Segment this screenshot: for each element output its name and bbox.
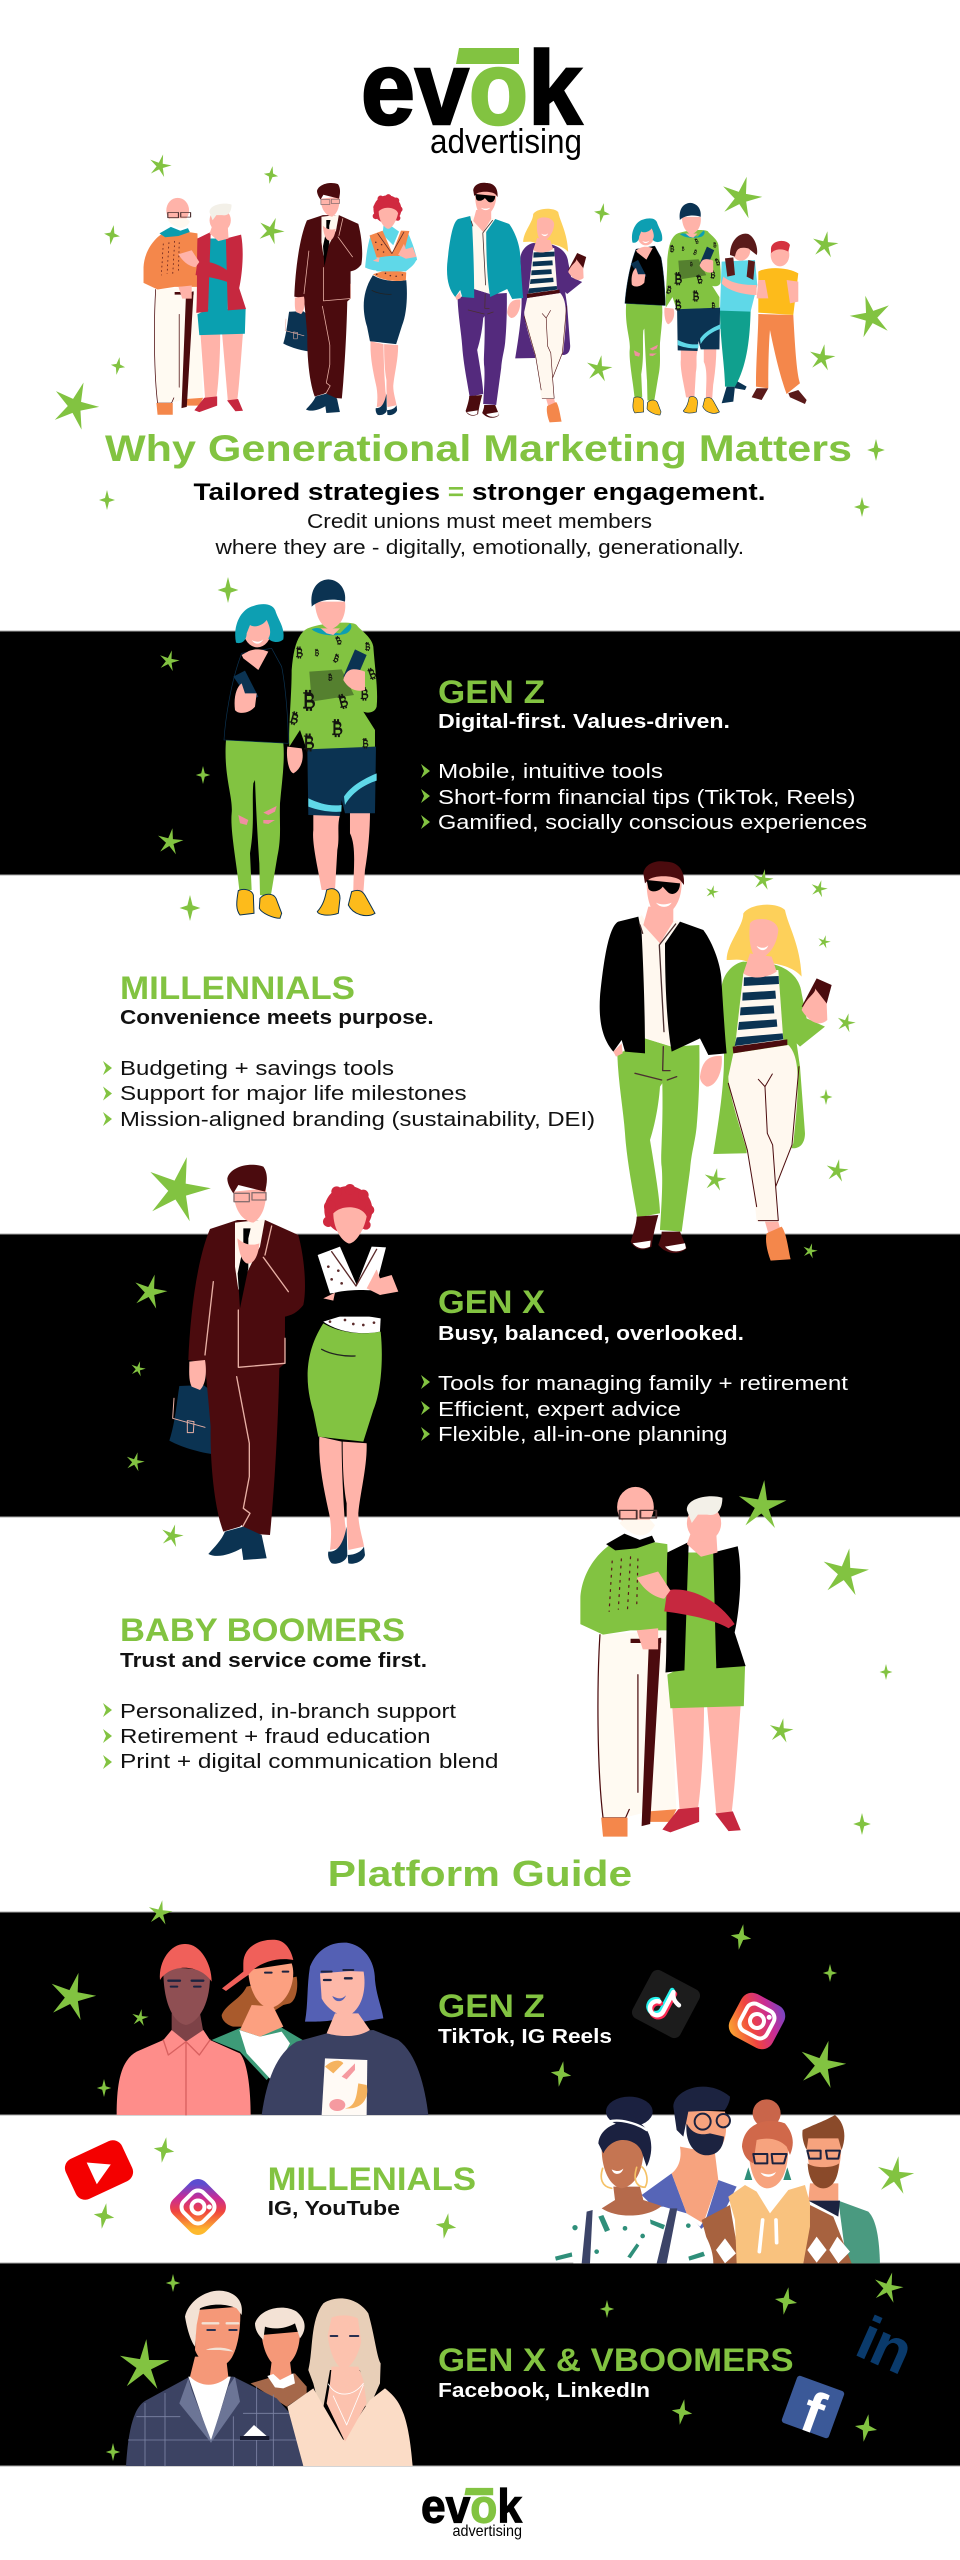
Baby boomer couple illustration	[580, 1487, 746, 1837]
icon: TikTok	[629, 1967, 703, 2041]
top logo: evok	[361, 31, 582, 147]
Gen X and Boomers platform text: GEN X & VBOOMERS	[438, 2342, 794, 2378]
Gen Z text block: Gamified, socially conscious experiences	[438, 812, 867, 834]
Millennials platform text	[268, 2161, 476, 2220]
icon: Instagram on black	[725, 1989, 789, 2053]
portrait: older woman behind	[251, 2308, 307, 2407]
Millennials text block: Convenience meets purpose.	[120, 1007, 434, 1029]
icon: LinkedIn: in	[847, 2304, 922, 2387]
portrait: salmon shirt	[117, 1944, 251, 2115]
footer logo: evok	[421, 2481, 522, 2534]
Gen Z text block: Short-form financial tips (TikTok, Reels)	[438, 787, 856, 809]
Gen X couple illustration	[169, 1165, 399, 1564]
Gen X text block	[421, 1284, 849, 1446]
Millennials text block: Budgeting + savings tools	[120, 1058, 394, 1080]
Boomers text block: Print + digital communication blend	[120, 1751, 498, 1773]
Millennials platform text: IG, YouTube	[268, 2198, 400, 2220]
Millennials text block: Mission-aligned branding (sustainability, DEI)	[120, 1109, 595, 1131]
portrait: blue hair	[262, 1943, 428, 2115]
Millennials text block	[103, 970, 595, 1131]
Gen Z text block	[421, 674, 867, 834]
Gen X and Boomers platform text: Facebook, LinkedIn	[438, 2380, 650, 2402]
icon: Facebook	[777, 2373, 846, 2451]
portrait: man with glasses and beard	[642, 2087, 737, 2230]
Boomers text block: Personalized, in-branch support	[120, 1701, 457, 1723]
hero stars	[47, 152, 895, 603]
tagline: Tailored strategies = stronger engagement.	[194, 479, 766, 506]
Boomers text block: BABY BOOMERS	[120, 1612, 405, 1648]
platform older generations portraits	[126, 2291, 413, 2466]
Gen X and Boomers platform text	[438, 2342, 794, 2402]
platform millennial portraits	[555, 2087, 880, 2263]
main title: Why Generational Marketing Matters	[105, 428, 852, 469]
Boomers text block: Trust and service come first.	[120, 1650, 427, 1672]
Gen X text block: Flexible, all-in-one planning	[438, 1424, 728, 1446]
Gen Z section stars	[155, 648, 210, 921]
Millennials text block: MILLENNIALS	[120, 970, 355, 1006]
intro text: Credit unions must meet members	[307, 511, 652, 533]
Gen X text block: GEN X	[438, 1284, 546, 1320]
Gen X text block: Tools for managing family + retirement	[438, 1373, 849, 1395]
Gen Z platform text	[438, 1988, 612, 2048]
Gen X text block: Busy, balanced, overlooked.	[438, 1323, 744, 1345]
top logo: advertising	[430, 123, 582, 161]
Gen Z platform text: TikTok, IG Reels	[438, 2026, 612, 2048]
Gen X section stars	[124, 1149, 819, 1548]
Boomers text block	[103, 1612, 498, 1773]
portrait: woman in hoodie	[702, 2099, 852, 2263]
portrait: woman with bun	[555, 2097, 713, 2263]
icon: Instagram on white	[165, 2174, 231, 2240]
portrait: man in plaid blazer	[126, 2291, 303, 2466]
black band: Gen Z	[0, 631, 960, 875]
Gen Z text block: GEN Z	[438, 674, 545, 710]
portrait: woman with long hair	[287, 2298, 413, 2466]
Gen X text block: Efficient, expert advice	[438, 1399, 681, 1421]
Millennial couple illustration	[600, 861, 832, 1261]
Gen Z text block: Digital-first. Values-driven.	[438, 711, 730, 733]
platform stars	[45, 1898, 917, 2461]
hero group: millennials	[447, 183, 586, 422]
icon: Facebook: f	[793, 2379, 834, 2447]
hero group: boomers	[144, 198, 246, 415]
intro text	[214, 511, 744, 559]
Boomers text block: Retirement + fraud education	[120, 1726, 430, 1748]
hero group: Gen Z teens	[720, 234, 807, 404]
Boomers section stars	[736, 1478, 892, 1835]
Millennials section stars	[702, 867, 857, 1191]
portrait: cap wearer	[212, 1940, 303, 2080]
footer logo: advertising	[453, 2523, 522, 2540]
platform Gen Z portraits	[117, 1940, 428, 2115]
Gen Z couple illustration	[224, 579, 377, 918]
teen with orange trousers	[752, 241, 807, 404]
Millennials text block: Support for major life milestones	[120, 1083, 467, 1105]
black band: Gen X	[0, 1234, 960, 1517]
black band: platform Gen X and Boomers	[0, 2263, 960, 2466]
icon: YouTube	[62, 2137, 136, 2203]
teen with teal trousers	[720, 234, 757, 403]
hero group: Gen X	[283, 183, 417, 415]
Platform Guide heading: Platform Guide	[328, 1853, 632, 1894]
black band: platform Gen Z	[0, 1912, 960, 2115]
Gen Z text block: Mobile, intuitive tools	[438, 761, 663, 783]
intro text: where they are - digitally, emotionally, generationally.	[214, 537, 744, 559]
Gen Z platform text: GEN Z	[438, 1988, 545, 2024]
hero group: Gen Z couple	[625, 203, 721, 415]
Millennials platform text: MILLENIALS	[268, 2161, 476, 2197]
portrait: bearded man in far right	[802, 2115, 880, 2263]
